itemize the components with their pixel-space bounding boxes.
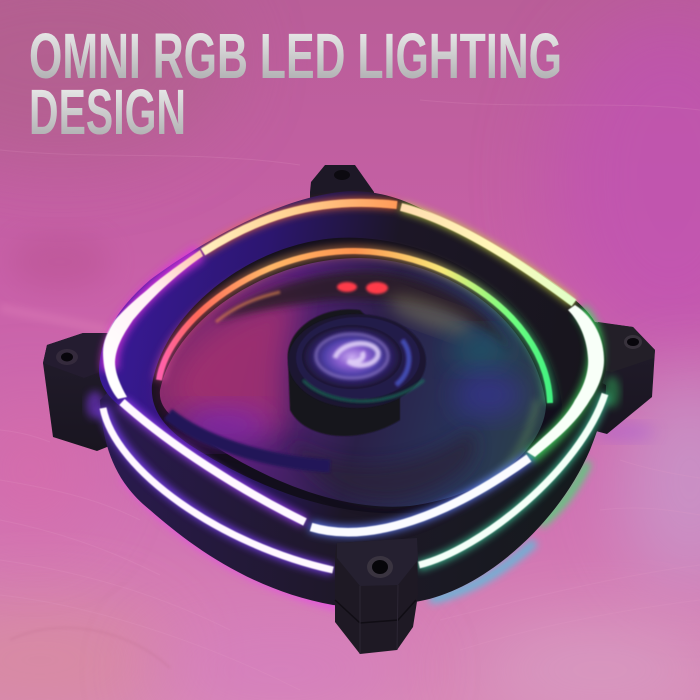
see-through disc bbox=[160, 258, 546, 507]
underglow on the table bbox=[125, 424, 655, 605]
mount: top corner bbox=[310, 165, 374, 200]
strut band bbox=[168, 414, 330, 466]
fan frame: upper rim bbox=[99, 191, 606, 544]
fan opening and blades bbox=[152, 238, 562, 513]
title bbox=[29, 20, 562, 148]
mount: bottom corner bbox=[335, 538, 418, 654]
LED strip: top left bbox=[203, 203, 397, 252]
inner LED ring bbox=[159, 251, 550, 403]
LED strip: lower right bbox=[419, 394, 605, 565]
blue blade glow bbox=[455, 373, 525, 417]
blade reflection left bbox=[216, 292, 280, 322]
LED glow halo bbox=[103, 203, 605, 570]
red hub reflection bbox=[337, 282, 388, 294]
LED strip: front upper right bbox=[311, 458, 529, 532]
dark blade mass at bottom bbox=[290, 430, 475, 501]
olive blade reflection right bbox=[384, 288, 476, 342]
LED strip: right corner bbox=[527, 305, 604, 457]
mount: right corner bbox=[592, 322, 655, 434]
mount: left corner bbox=[43, 333, 112, 451]
green edge glow bbox=[480, 400, 537, 490]
LED strip: front upper left bbox=[122, 402, 305, 522]
fan frame: lower rim bbox=[100, 360, 606, 606]
dark rotating blade at the top bbox=[215, 271, 510, 350]
LED strip: left corner bbox=[103, 250, 203, 399]
hub front face bbox=[288, 314, 426, 408]
teal blade glow bbox=[450, 332, 510, 368]
pink view through the blade gap bbox=[166, 292, 305, 435]
opening shadow ring bbox=[152, 238, 562, 513]
LED strip: top right bbox=[401, 207, 574, 303]
LED strip: lower left bbox=[103, 408, 333, 570]
rear hub body bbox=[288, 309, 400, 436]
title: DESIGN bbox=[29, 76, 186, 148]
